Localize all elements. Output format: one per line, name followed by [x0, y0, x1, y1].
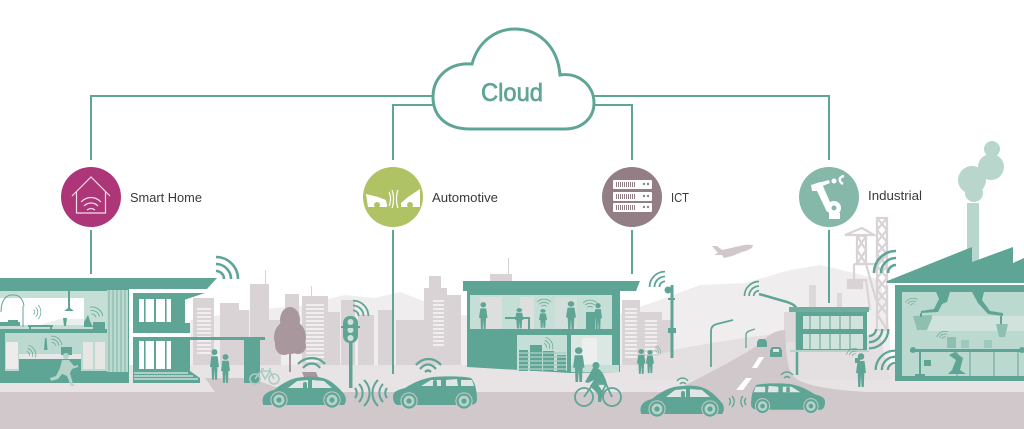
driveway: [205, 378, 290, 392]
panel: small industrial office: [789, 307, 869, 352]
connector lines: [91, 96, 829, 374]
icon: automotive: [363, 167, 423, 227]
car 2 with wifi: [393, 359, 477, 410]
icon: smart home: [61, 167, 121, 227]
wifi signals around industrial: [744, 251, 896, 370]
crane and tower: [845, 218, 887, 330]
signal between cars 3 and 4: [729, 396, 746, 407]
cyclist: [575, 362, 621, 406]
label: industrial: Industrial: [868, 189, 922, 203]
panel: smart home building: [0, 278, 265, 383]
street lights: [711, 294, 797, 375]
car 1 with wifi: [262, 358, 346, 409]
utility pole with wifi: [650, 272, 676, 358]
distant cars: [757, 339, 782, 357]
label: ICT: ICT: [671, 191, 689, 205]
people: pedestrians and woman: [573, 346, 662, 382]
bicycle: [250, 368, 279, 384]
cloud label: Cloud: [481, 79, 543, 107]
city skyline: [193, 258, 671, 368]
panel: factory: [887, 247, 1024, 381]
label: automotive: Automotive: [432, 191, 498, 205]
person: runner: [50, 353, 78, 386]
main road: [0, 392, 1024, 429]
label: smart home: Smart Home: [130, 191, 202, 205]
person with tablet: [846, 346, 866, 387]
icon: ICT: [602, 167, 662, 227]
icon: industrial robot: [799, 167, 859, 227]
ground: [0, 333, 1024, 395]
signal between cars: [355, 380, 387, 406]
road to the horizon: [684, 330, 900, 395]
cloud: [433, 29, 594, 129]
car 3: [640, 378, 724, 418]
tree: [274, 307, 306, 372]
airplane: [712, 245, 753, 258]
people: couple: [210, 349, 230, 383]
icon: house wifi signal: [216, 257, 238, 279]
smoke stack: [958, 141, 1004, 263]
panel: ICT office building: [463, 281, 640, 373]
traffic light: [341, 301, 368, 388]
distant industrial plant: [784, 285, 842, 342]
background mountains: [190, 265, 890, 370]
car 4: [751, 372, 825, 414]
